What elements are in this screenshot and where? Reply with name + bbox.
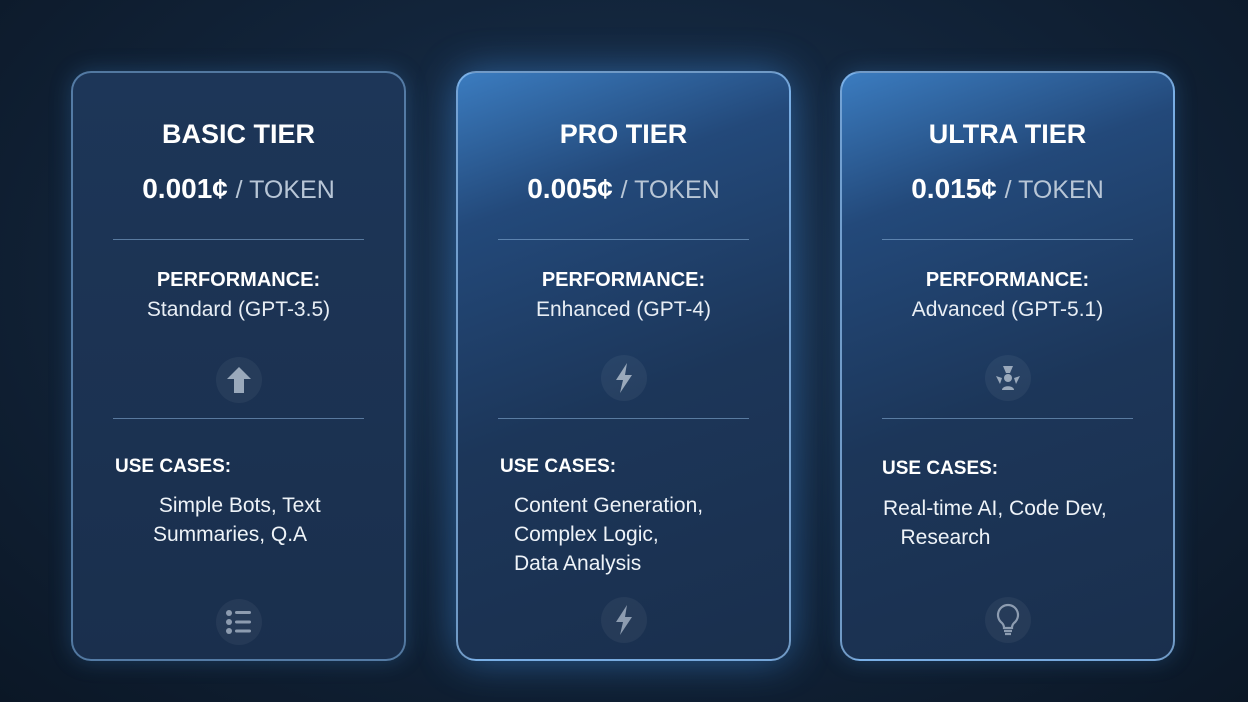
icon: list xyxy=(216,599,262,645)
icon: lightbulb xyxy=(984,597,1030,643)
heading: ultra tier: ULTRA TIER xyxy=(929,119,1086,149)
use cases label: USE CASES: xyxy=(500,456,616,477)
performance value: Standard (GPT-3.5) xyxy=(147,298,330,321)
icon: lightning xyxy=(600,597,646,643)
card: ultra tier xyxy=(840,71,1175,661)
use cases text xyxy=(153,494,321,546)
use cases text: Real-time AI, Code Dev, xyxy=(883,497,1107,520)
use cases text: Summaries, Q.A xyxy=(153,523,307,546)
use cases label: USE CASES: xyxy=(882,458,998,479)
card: pro tier xyxy=(456,71,791,661)
price: basic: 0.001¢ / TOKEN xyxy=(142,173,335,204)
use cases text: Complex Logic, xyxy=(514,523,659,546)
use cases text: Data Analysis xyxy=(514,552,641,575)
performance label: PERFORMANCE: xyxy=(926,269,1089,291)
use cases text: Content Generation, xyxy=(514,494,703,517)
heading: pro tier: PRO TIER xyxy=(560,119,687,149)
use cases text xyxy=(514,494,703,575)
price: pro: 0.005¢ / TOKEN xyxy=(527,173,720,204)
icon: network xyxy=(984,355,1030,401)
performance value: Advanced (GPT-5.1) xyxy=(912,298,1103,321)
use cases text: Research xyxy=(900,526,990,549)
performance label: PERFORMANCE: xyxy=(542,269,705,291)
use cases label: USE CASES: xyxy=(115,456,231,477)
use cases text: Simple Bots, Text xyxy=(159,494,321,517)
card: basic tier xyxy=(71,71,406,661)
price: ultra: 0.015¢ / TOKEN xyxy=(911,173,1104,204)
use cases text xyxy=(883,497,1107,549)
performance label: PERFORMANCE: xyxy=(157,269,320,291)
icon: lightning xyxy=(600,355,646,401)
performance value: Enhanced (GPT-4) xyxy=(536,298,711,321)
icon: up arrow xyxy=(216,357,262,403)
heading: basic tier: BASIC TIER xyxy=(162,119,315,149)
